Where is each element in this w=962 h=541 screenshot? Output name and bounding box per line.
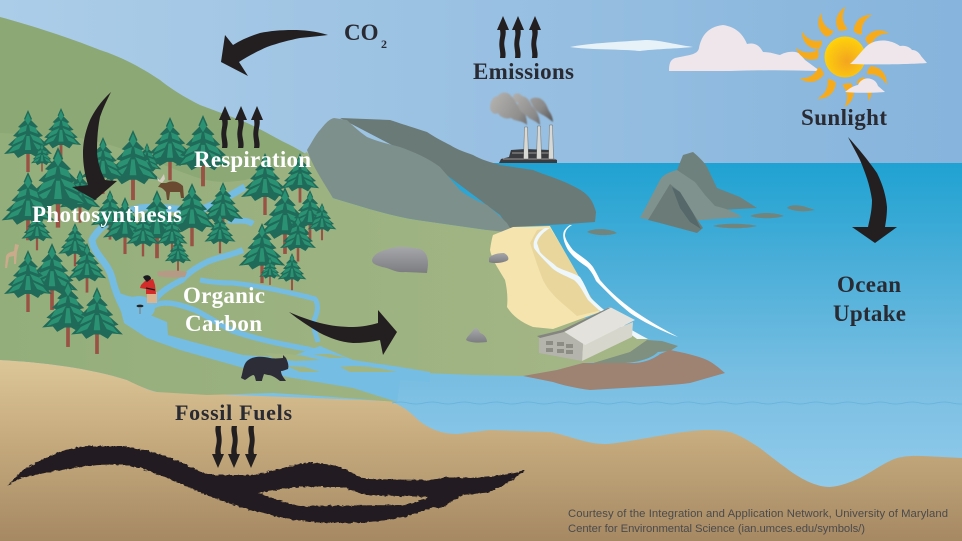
upper channel	[200, 280, 318, 342]
arrow: photosynthesis	[72, 92, 117, 200]
factory	[490, 93, 557, 163]
mud	[523, 350, 725, 390]
credit text: Center for Environmental Science (ian.umces.edu/symbols/)	[568, 523, 865, 535]
headland: dark side	[340, 118, 596, 233]
river islands	[265, 353, 397, 372]
clouds	[570, 25, 820, 71]
beach	[490, 224, 680, 340]
large boulder	[372, 247, 428, 273]
headland: light side	[307, 118, 513, 233]
icon: sun	[795, 7, 892, 107]
small rock on beach	[489, 253, 508, 263]
surf line near	[534, 228, 648, 339]
building highlights	[503, 153, 555, 159]
arrow: organic carbon to ocean	[289, 310, 397, 355]
wet sand	[530, 228, 602, 316]
gray headland	[307, 118, 596, 233]
large cloud	[669, 25, 820, 71]
label: Emissions: Emissions	[473, 59, 574, 84]
icon: bear	[241, 355, 288, 381]
pool at hiker	[123, 296, 155, 320]
fossil fuel arrows	[212, 426, 257, 468]
sea floor and soil	[0, 360, 962, 541]
building block	[499, 149, 557, 163]
emissions arrows	[497, 16, 541, 58]
chimneys	[524, 125, 554, 159]
credit text: Courtesy of the Integration and Application Network, University of Maryland	[568, 508, 948, 520]
label: CO2: CO	[344, 20, 378, 45]
label: Organic: Organic	[183, 283, 265, 308]
label: CO2: 2	[381, 37, 387, 51]
small cloud	[845, 78, 885, 93]
label: Uptake: Uptake	[833, 301, 906, 326]
label: Respiration: Respiration	[194, 147, 311, 172]
surf line far	[563, 225, 678, 337]
respiration arrows	[219, 106, 263, 148]
warehouse building	[537, 307, 635, 361]
icon: hiker	[136, 275, 157, 314]
middle channel	[150, 303, 330, 355]
forest	[2, 108, 336, 354]
land: far hill	[0, 17, 320, 215]
roof	[563, 307, 635, 345]
cloud over sun	[850, 41, 927, 64]
front wall	[539, 331, 583, 361]
label: Ocean: Ocean	[837, 272, 901, 297]
label: Photosynthesis: Photosynthesis	[32, 202, 182, 227]
marsh	[590, 340, 678, 364]
land: near green	[0, 133, 678, 402]
arrow: CO2 to forest	[221, 30, 328, 76]
wide lower channel	[116, 292, 430, 402]
wisp cloud	[570, 40, 693, 51]
sand	[490, 226, 600, 329]
upper river branch	[92, 187, 245, 318]
sea stack back	[677, 152, 757, 210]
land rocks	[372, 247, 508, 343]
icon: deer	[5, 244, 19, 268]
windows	[546, 341, 573, 354]
brown delta	[523, 340, 725, 390]
small rock on grass	[466, 328, 487, 343]
sea stack mid	[640, 170, 742, 222]
near water wedge	[550, 224, 680, 340]
label: Carbon: Carbon	[185, 311, 262, 336]
label: Fossil Fuels: Fossil Fuels	[175, 400, 292, 425]
sea stack front	[648, 184, 703, 233]
side wall	[582, 322, 633, 361]
icon: moose	[157, 174, 184, 200]
sea stack shadow	[672, 187, 701, 229]
coal seam	[7, 446, 526, 523]
side stream	[155, 220, 253, 300]
small rocks	[587, 205, 815, 235]
water surface line	[392, 402, 962, 404]
smoke plumes	[490, 93, 553, 125]
roof edge	[537, 307, 612, 338]
sky	[0, 0, 962, 164]
log across stream	[157, 270, 187, 278]
arrow: ocean uptake	[848, 137, 897, 243]
river	[92, 187, 430, 402]
ocean rocks	[587, 152, 815, 235]
label: Sunlight: Sunlight	[801, 105, 887, 130]
ocean	[0, 163, 962, 503]
